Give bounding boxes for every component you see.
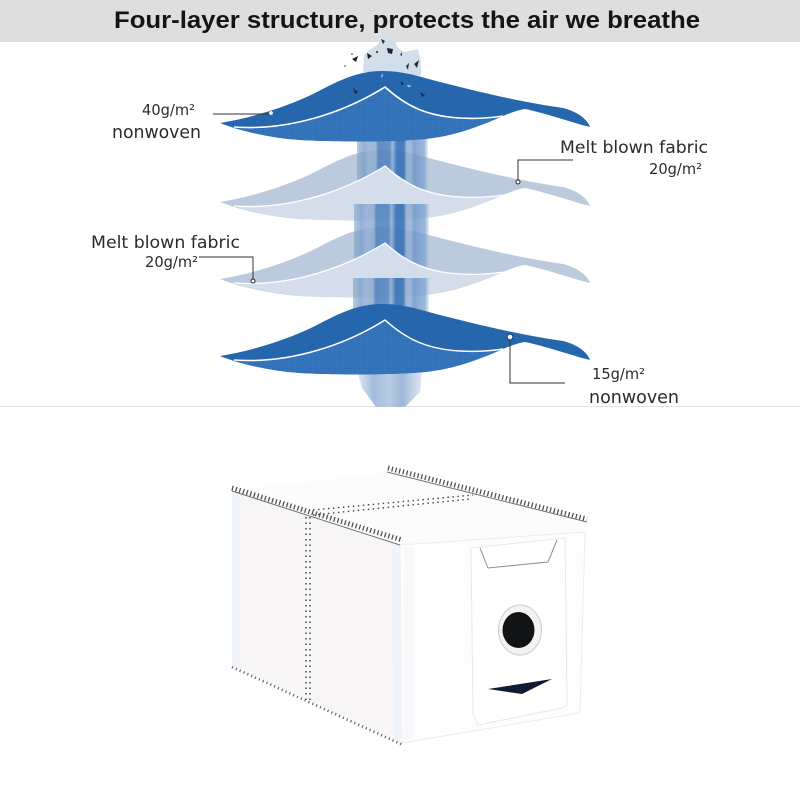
title banner: Four-layer structure, protects the air we breathe <box>114 7 700 34</box>
dust bag illustration <box>232 468 587 745</box>
label: 15g nonwoven: nonwoven <box>589 387 679 408</box>
label: 40g nonwoven: nonwoven <box>112 122 201 143</box>
cardboard flap <box>471 538 567 725</box>
front face soft left band <box>404 548 414 741</box>
bottom stitching <box>232 667 403 745</box>
label: 15g nonwoven: 15g/m² <box>592 365 645 383</box>
label: melt blown fabric left <box>91 233 255 283</box>
bottom airflow streak <box>357 370 422 407</box>
label: 40g nonwoven <box>112 101 273 143</box>
bag top face <box>232 472 587 545</box>
bag left side face <box>232 491 402 743</box>
diagonal stitching on top <box>313 495 473 515</box>
label: melt blown fabric right: Melt blown fabric <box>560 138 708 158</box>
top seam hatching <box>232 468 587 540</box>
section divider <box>0 406 800 407</box>
label: melt blown fabric right <box>516 138 708 184</box>
layer 2: melt blown fabric with airflow <box>220 137 590 220</box>
label: melt blown fabric left: 20g/m² <box>145 253 198 271</box>
layer 1: 40g nonwoven <box>220 71 590 141</box>
label: melt blown fabric right: 20g/m² <box>649 160 702 178</box>
title banner <box>0 0 800 42</box>
dust cloud above filter <box>344 35 421 76</box>
side face edge shading <box>232 491 402 743</box>
bag front face <box>400 532 585 743</box>
slot <box>488 679 552 694</box>
suction port <box>498 605 542 655</box>
flap tab <box>480 540 557 568</box>
layer 3: melt blown fabric with airflow <box>220 204 590 318</box>
top edge lines <box>232 472 587 545</box>
label: 40g nonwoven: 40g/m² <box>142 101 195 119</box>
label: 15g nonwoven <box>507 334 679 408</box>
label: melt blown fabric left: Melt blown fabric <box>91 233 240 253</box>
layer 4: 15g nonwoven <box>220 304 590 374</box>
vertical stitching <box>306 517 310 702</box>
